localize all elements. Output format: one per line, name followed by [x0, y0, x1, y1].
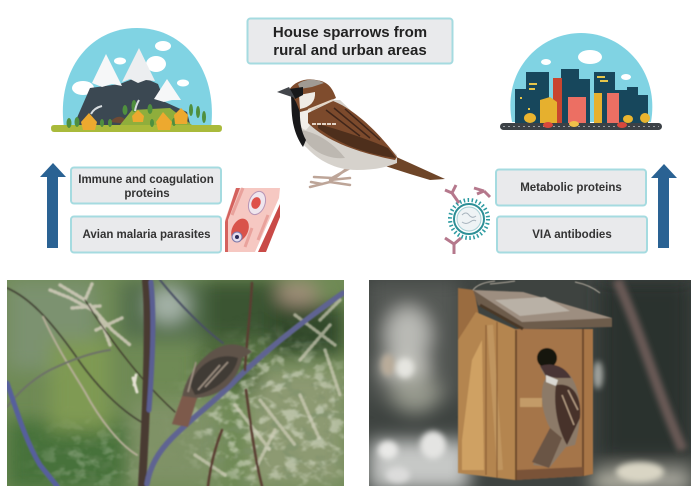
- roof: [473, 290, 612, 329]
- legs and feet: [310, 168, 350, 187]
- title box: rural and urban areas: [273, 42, 427, 59]
- sparrow illustration: [277, 79, 445, 187]
- sparrow in photo: [182, 344, 252, 399]
- box: avian malaria parasites: Avian malaria parasites: [82, 229, 211, 241]
- up arrow: urban: [651, 164, 677, 248]
- box: metabolic proteins: [496, 170, 646, 206]
- rural landscape illustration: [51, 28, 222, 132]
- up arrow: rural: [40, 163, 66, 248]
- black bib: [291, 96, 306, 147]
- front wall: [514, 328, 583, 471]
- icon: blood vessel with malaria parasites: [225, 188, 280, 252]
- box: immune and coagulation proteins: Immune and coagulation: [78, 174, 214, 186]
- box: VIA antibodies: [497, 216, 647, 252]
- box: immune and coagulation proteins: [71, 168, 221, 204]
- title box: House sparrows from: [273, 24, 427, 41]
- side wall: [458, 312, 515, 480]
- photo: urban sparrow at nest box: [369, 280, 691, 490]
- tail: [385, 155, 445, 180]
- icon: virus with antibodies: [445, 185, 490, 254]
- photo: rural sparrow on branch: [7, 280, 344, 490]
- head: [289, 79, 336, 112]
- box: avian malaria parasites: [71, 216, 221, 252]
- box: VIA antibodies: VIA antibodies: [532, 229, 612, 241]
- foliage texture: [39, 327, 344, 486]
- box: immune and coagulation proteins: proteins: [124, 188, 170, 200]
- box: metabolic proteins: Metabolic proteins: [520, 182, 622, 194]
- title box: [248, 18, 452, 64]
- sparrow on nest box: [533, 365, 580, 467]
- wing: [308, 101, 397, 160]
- beak: [277, 87, 295, 98]
- urban city illustration: [500, 33, 662, 130]
- body: [292, 100, 397, 170]
- back wall: [458, 288, 479, 340]
